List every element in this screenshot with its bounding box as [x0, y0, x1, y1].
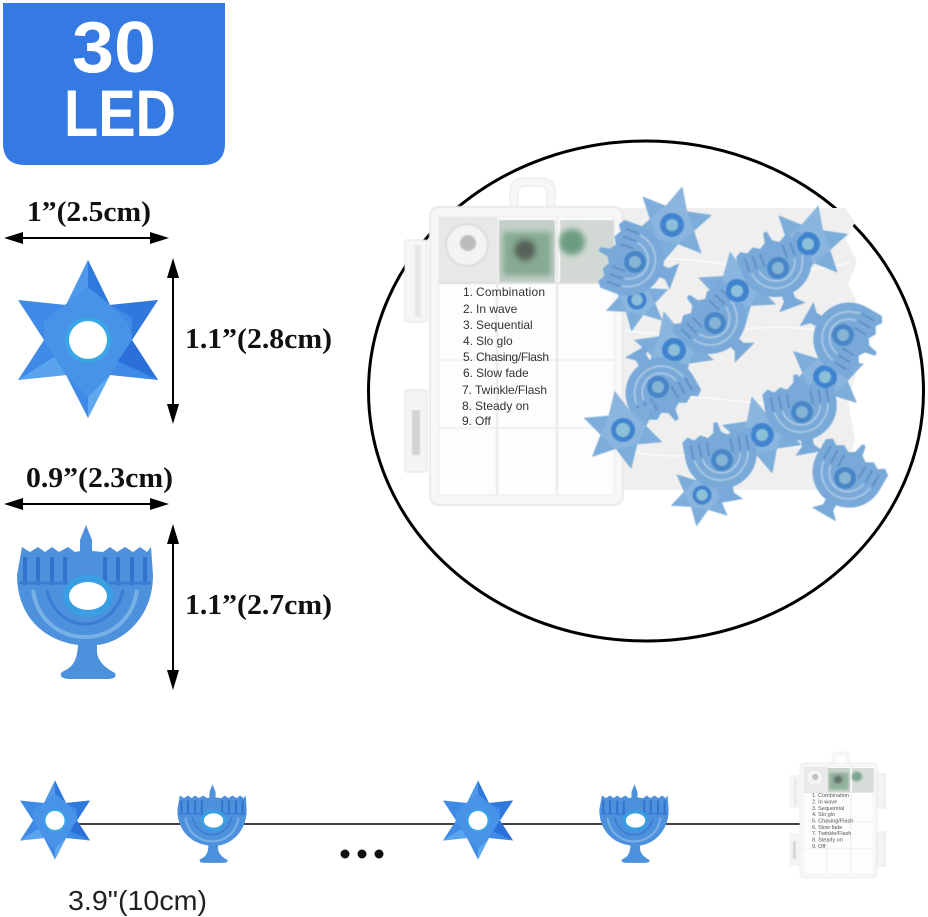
light string row: [20, 780, 669, 863]
spacing label: 3.9"(10cm): [68, 885, 207, 916]
menorah height dimension: 1.1”(2.7cm): [185, 590, 332, 621]
mode list: Twinkle/Flash: [475, 383, 547, 397]
right hinges: [877, 774, 885, 866]
badge: 30 LED: LED: [64, 76, 176, 150]
mode list: 9.: [462, 414, 472, 428]
ellipsis dots: [340, 850, 384, 858]
small mode list: 4. Slo glo: [812, 812, 835, 818]
battery box: [405, 178, 623, 505]
mode list: 7.: [462, 383, 472, 397]
blue lights cluster: [579, 177, 895, 532]
folded light string card: [622, 208, 857, 490]
menorah width dimension: 0.9”(2.3cm): [26, 463, 173, 494]
star width dimension: 1”(2.5cm): [27, 197, 151, 228]
string wire: [70, 823, 800, 825]
small mode list: 9. Off: [812, 844, 826, 850]
mode list: 5.: [463, 350, 473, 364]
star width dimension: [4, 197, 169, 244]
star centre rings: [661, 214, 836, 446]
panel: circular product photo: [368, 141, 924, 641]
mode list: Combination: [476, 285, 545, 299]
menorah height dimension: [167, 524, 332, 690]
small mode list: 6. Slow fade: [812, 825, 842, 831]
mode list: Sequential: [476, 318, 533, 332]
mode list: 8.: [462, 399, 472, 413]
star height dimension: 1.1”(2.8cm): [185, 324, 332, 355]
box body: [790, 752, 877, 878]
mode list: 2.: [463, 302, 473, 316]
icon: large star light: [18, 260, 158, 418]
icon: star light 1: [20, 780, 90, 860]
icon: menorah light 2: [599, 784, 669, 863]
small mode list: 2. In wave: [812, 800, 837, 806]
small mode list: 8. Steady on: [812, 838, 843, 844]
badge: 30 LED: 30: [72, 8, 156, 88]
mode list: 6.: [463, 366, 473, 380]
icon: large menorah light: [17, 525, 153, 679]
mode list: Chasing/Flash: [476, 350, 549, 364]
mode list: Steady on: [475, 399, 529, 413]
badge: 30 LED: [3, 3, 225, 165]
mode list: Slow fade: [476, 366, 529, 380]
star height dimension: [167, 258, 332, 424]
small mode list: [812, 793, 853, 850]
mode list: 4.: [463, 334, 473, 348]
mode list: Slo glo: [476, 334, 513, 348]
small mode list: 7. Twinkle/Flash: [812, 831, 851, 837]
circle outline: [368, 141, 924, 641]
small mode list: 1. Combination: [812, 793, 849, 799]
small mode list: 3. Sequential: [812, 806, 844, 812]
icon: menorah light 1: [177, 784, 247, 863]
mode list: In wave: [476, 302, 518, 316]
small mode list: 5. Chasing/Flash: [812, 818, 853, 824]
small battery box: [790, 752, 885, 878]
menorah width dimension: [4, 463, 173, 510]
mode list: 3.: [463, 318, 473, 332]
mode list: 1.: [463, 285, 473, 299]
mode list: Off: [475, 414, 491, 428]
mode list: [462, 285, 549, 428]
icon: star light 2: [443, 780, 513, 860]
